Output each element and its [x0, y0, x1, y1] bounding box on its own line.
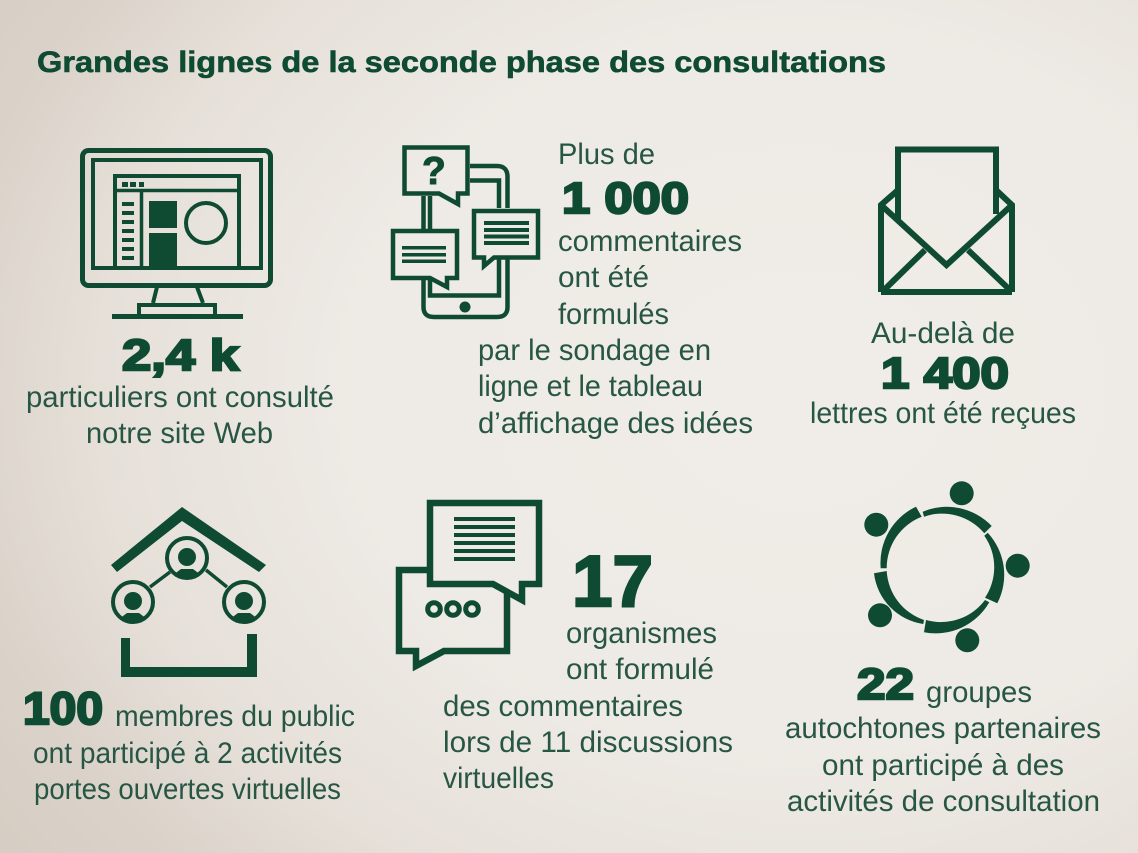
- stat: 1 400: 1 400: [881, 349, 1009, 398]
- panel: letters: [810, 150, 1076, 430]
- description: indigenous groups: ont participé à des: [822, 749, 1064, 782]
- description: website visitors: particuliers ont consulté: [26, 381, 334, 414]
- description: virtual open houses: portes ouvertes virtuelles: [34, 773, 341, 806]
- description: organizations: organismes: [566, 617, 717, 650]
- panel: indigenous groups: [785, 481, 1101, 818]
- description: website visitors: notre site Web: [86, 417, 273, 450]
- description: online comments: [478, 225, 753, 440]
- description: virtual open houses: ont participé à 2 activités: [33, 737, 342, 770]
- icon: phone with speech bubbles: [393, 148, 538, 317]
- icon: ring of people: [864, 481, 1030, 652]
- description: indigenous groups: groupes: [926, 676, 1032, 709]
- stat: 1 000: 1 000: [562, 174, 689, 223]
- description: online comments: par le sondage en: [478, 334, 711, 367]
- description: organizations: virtuelles: [443, 762, 554, 795]
- icon: house with connected people: [111, 507, 266, 677]
- description: indigenous groups: autochtones partenaires: [785, 712, 1101, 745]
- panel: website visitors: [26, 150, 334, 450]
- description: online comments: ligne et le tableau: [478, 370, 703, 403]
- icon: phone with speech bubbles: ?: [422, 150, 446, 193]
- description: organizations: ont formulé: [566, 653, 714, 686]
- stat: 2,4 k: 2,4 k: [122, 331, 240, 380]
- description: online comments: ont été: [558, 261, 649, 294]
- stat: 100: 100: [23, 683, 103, 734]
- title: Grandes lignes de la seconde phase des consultations: [37, 46, 886, 79]
- description: letters: lettres ont été reçues: [810, 397, 1076, 430]
- description: online comments: commentaires: [558, 225, 742, 258]
- icon: open envelope: [881, 150, 1012, 292]
- description: organizations: des commentaires: [443, 690, 683, 723]
- description: virtual open houses: [33, 700, 355, 806]
- label: plus de: Plus de: [558, 138, 655, 171]
- panel: organizations: [399, 503, 733, 795]
- icon: two speech bubbles: [399, 503, 539, 666]
- description: organizations: [443, 617, 733, 795]
- description: website visitors: [26, 381, 334, 450]
- description: online comments: formulés: [558, 298, 669, 331]
- icon: computer monitor: [82, 150, 270, 319]
- description: indigenous groups: activités de consultation: [787, 785, 1100, 818]
- description: online comments: d’affichage des idées: [478, 407, 753, 440]
- stat: 17: 17: [572, 542, 653, 622]
- description: virtual open houses: membres du public: [115, 700, 355, 733]
- description: organizations: lors de 11 discussions: [443, 726, 733, 759]
- stat: 22: 22: [857, 660, 914, 709]
- panel: online comments: [393, 138, 753, 440]
- panel: virtual open houses: [23, 507, 355, 806]
- description: indigenous groups: [785, 676, 1101, 818]
- label: au-delà de: Au-delà de: [871, 317, 1015, 350]
